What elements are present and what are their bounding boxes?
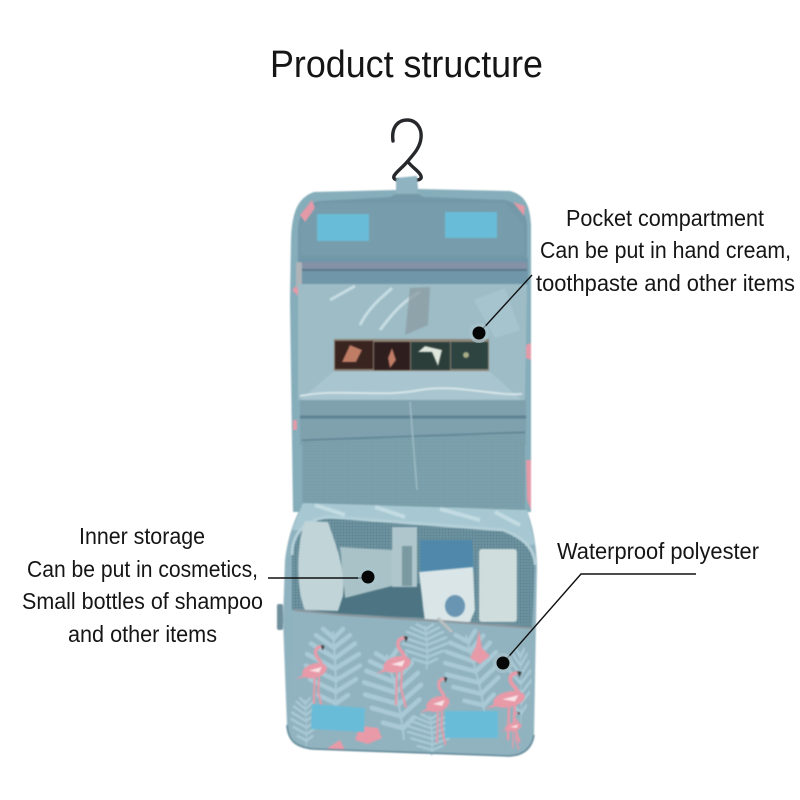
flap hanging tab bbox=[396, 176, 418, 194]
text: inner storage: Inner storage bbox=[79, 523, 205, 549]
zipper pull bbox=[296, 262, 302, 288]
text: inner storage: and other items bbox=[68, 621, 217, 647]
icon: black hanging hook bbox=[393, 120, 421, 180]
pouch zipper bbox=[294, 610, 533, 628]
text: pocket compartment bbox=[536, 205, 795, 296]
bag illustration bbox=[277, 176, 537, 756]
lower pouch body bbox=[283, 503, 537, 756]
slot pockets bbox=[300, 400, 526, 445]
text: inner storage bbox=[22, 523, 263, 647]
upper flap shell bbox=[290, 176, 531, 512]
callout pointer: inner storage bbox=[268, 567, 378, 587]
centre mesh divider bbox=[302, 433, 525, 512]
zipper band bbox=[298, 258, 528, 284]
velcro strip right bbox=[445, 212, 497, 238]
title: Product structure bbox=[270, 44, 543, 86]
text: inner storage: Can be put in cosmetics, bbox=[27, 556, 258, 582]
flap inner lining bbox=[298, 194, 527, 262]
small bottles behind mesh bbox=[298, 521, 517, 622]
velcro strip lower left bbox=[311, 704, 365, 732]
velcro strip left bbox=[317, 214, 369, 241]
palm leaves print bbox=[292, 624, 531, 755]
velcro strip lower right bbox=[445, 711, 498, 738]
front panel with flamingo print bbox=[289, 610, 534, 756]
callout pointer: pocket compartment bbox=[469, 275, 532, 343]
text: pocket compartment: Pocket compartment bbox=[566, 205, 765, 231]
flap pink print accents bbox=[292, 200, 531, 510]
pouch bottom seam bbox=[287, 725, 534, 756]
flamingos print bbox=[296, 630, 527, 750]
text: inner storage: Small bottles of shampoo bbox=[22, 588, 263, 614]
side tab bbox=[277, 604, 283, 630]
pocket bottom fold bbox=[300, 371, 522, 400]
clear plastic pocket bbox=[298, 284, 527, 400]
callout pointer: waterproof polyester bbox=[493, 574, 696, 673]
mesh compartment bbox=[292, 517, 535, 628]
patterned card inside pocket bbox=[334, 339, 489, 371]
text: waterproof polyester: Waterproof polyester bbox=[557, 538, 759, 564]
